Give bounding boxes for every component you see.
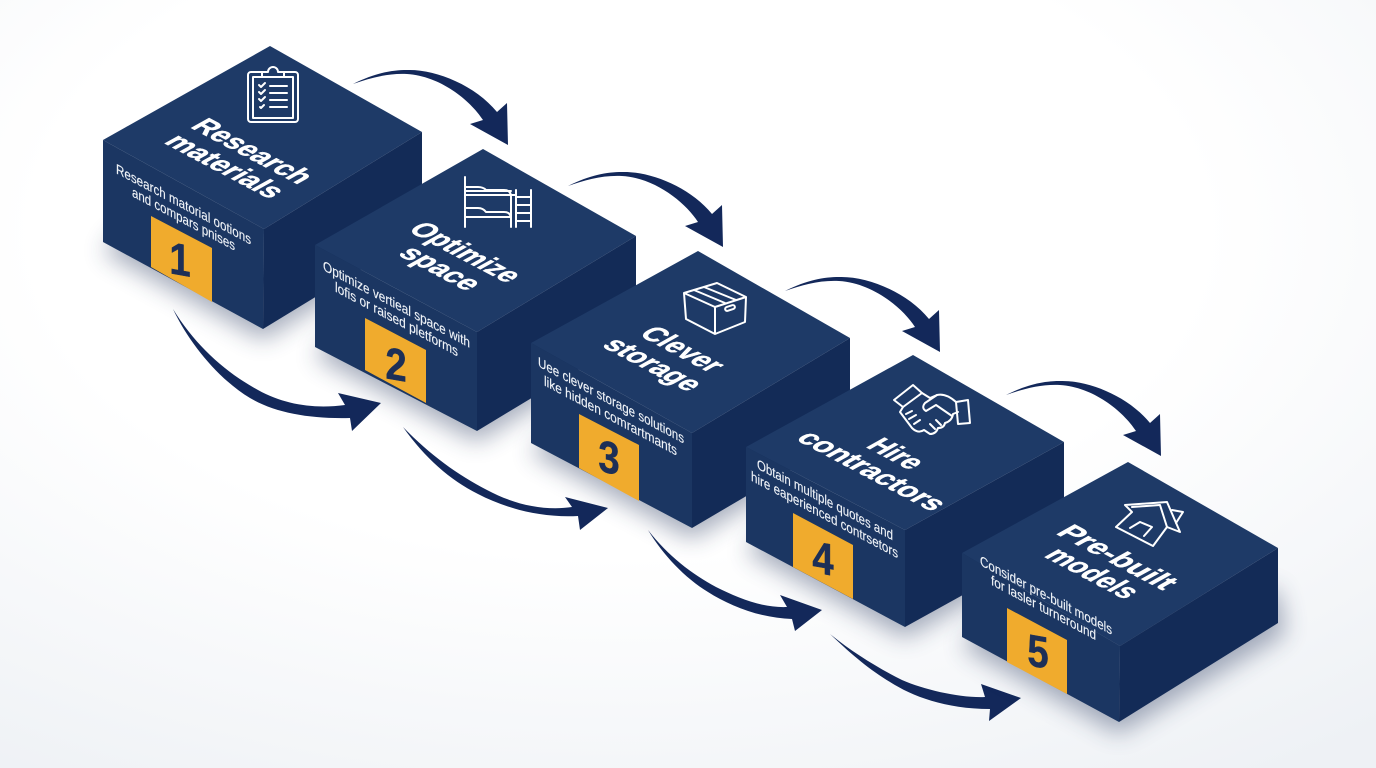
- description: hire eaperienced contrsetors: [751, 468, 898, 562]
- arrow: step 1 to 2, lower: [173, 309, 381, 431]
- number: 1: [169, 232, 191, 287]
- right face: [1119, 548, 1278, 722]
- number: 4: [812, 531, 834, 586]
- description: Consider pre-built models: [980, 553, 1112, 639]
- box 2: [315, 149, 636, 431]
- box 4: [746, 355, 1064, 627]
- arrow: step 2 to 3, upper: [568, 172, 723, 247]
- right face: [477, 236, 636, 431]
- title: materials: [157, 130, 293, 203]
- top face: [746, 355, 1064, 530]
- title: Research: [184, 114, 322, 188]
- number tile: [151, 216, 212, 302]
- title: storage: [595, 333, 711, 395]
- arrow: step 3 to 4, lower: [648, 530, 822, 631]
- arrow: step 2 to 3, lower: [403, 427, 608, 530]
- top face: [962, 462, 1278, 646]
- right face: [263, 132, 422, 329]
- description: Obtain multiple quotes and: [757, 456, 893, 544]
- arrow: step 4 to 5, lower: [830, 634, 1021, 721]
- title: Hire: [859, 434, 933, 474]
- shadow: box 4: [746, 500, 1064, 638]
- top face: [103, 46, 422, 229]
- title: space: [391, 242, 490, 295]
- shadow: box 5: [962, 590, 1285, 734]
- top face: [315, 149, 636, 332]
- box 3: [531, 251, 850, 528]
- shadow: box 2: [315, 300, 636, 442]
- description: Uee clever storage solutions: [538, 354, 684, 447]
- description: Optimize vertieal space with: [323, 258, 470, 352]
- shadow: box 3: [531, 400, 850, 539]
- left face: [315, 245, 477, 431]
- icon: house: [1116, 502, 1183, 546]
- arrow: step 1 to 2, upper: [353, 70, 508, 145]
- box 1: [103, 46, 422, 329]
- description: and compars pnises: [132, 184, 235, 255]
- right face: [905, 442, 1064, 627]
- icon: cardboard box: [684, 283, 746, 334]
- number: 5: [1027, 624, 1049, 679]
- icon: bunk bed: [465, 177, 531, 227]
- left face: [103, 140, 264, 329]
- left face: [962, 553, 1120, 722]
- number tile: [579, 414, 639, 501]
- title: Clever: [632, 322, 733, 376]
- number: 3: [598, 430, 620, 485]
- title: Pre-built: [1049, 520, 1187, 594]
- shadow: box 1: [103, 200, 422, 340]
- title: models: [1037, 543, 1148, 603]
- description: Research matorial ootions: [116, 161, 251, 249]
- description: like hidden comrartmants: [544, 373, 677, 459]
- description: for lasler turneround: [991, 573, 1096, 644]
- icon: clipboard: [248, 67, 298, 122]
- left face: [531, 343, 692, 528]
- number tile: [793, 513, 853, 599]
- arrow: step 3 to 4, upper: [785, 277, 940, 352]
- left face: [746, 447, 905, 627]
- top face: [531, 251, 850, 433]
- title: contractors: [789, 426, 955, 515]
- number tile: [1007, 608, 1067, 694]
- number: 2: [385, 337, 407, 392]
- right face: [692, 338, 850, 528]
- arrow: step 4 to 5, upper: [1006, 381, 1161, 456]
- icon: handshake: [894, 385, 970, 434]
- number tile: [365, 318, 426, 403]
- box 5: [962, 462, 1278, 722]
- description: lofis or raised pletforms: [335, 279, 458, 360]
- title: Optimize: [401, 218, 530, 287]
